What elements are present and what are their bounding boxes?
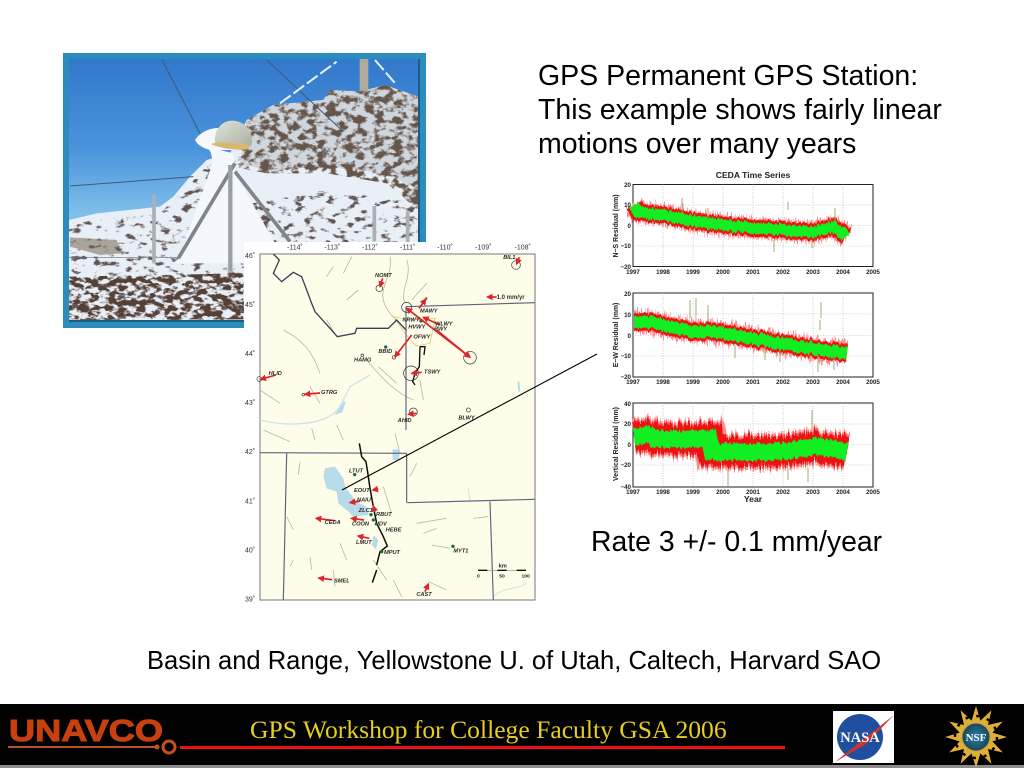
axis labels: -112˚ [362,244,378,252]
NSF logo [945,706,1007,768]
station labels: MAWY [420,309,439,315]
station circles [257,261,520,416]
heading text: This example shows fairly linear [538,94,942,126]
axis labels: 43˚ [245,399,255,407]
chart: vertical residual: Vertical Residual (mm) [613,407,620,481]
station labels: CEDA [325,520,341,526]
chart: E-W residual: 2004 [836,379,850,386]
footer title: GPS Workshop for College Faculty GSA 2006 [250,715,727,744]
axis labels [245,448,255,604]
GPS dome [215,121,252,149]
axis labels: 45˚ [245,301,255,309]
chart: N-S residual: 2001 [746,269,760,276]
chart: N-S residual [613,182,880,276]
scale bar: 50 [499,574,505,580]
axis labels: -110˚ [437,244,453,252]
chart: vertical residual: 1998 [656,489,670,496]
chart: E-W residual: −20 [620,374,632,381]
UNAVCO logo: UNAVCO [9,713,163,748]
station labels: LMUT [356,540,372,546]
axis labels [245,244,531,407]
rate caption: Rate 3 +/- 0.1 mm/year [591,526,882,558]
station labels: HVWY [408,325,427,331]
NASA logo: NASA [840,730,880,746]
chart: N-S residual: 2000 [716,269,730,276]
station labels: NRWY [402,318,421,324]
chart: vertical residual: 2001 [746,489,760,496]
heading text: motions over many years [538,128,856,160]
station labels: GTRG [321,390,338,396]
station labels: MYT1 [453,549,468,555]
chart: vertical residual: 40 [624,401,632,408]
chart: N-S residual: 2003 [806,269,820,276]
fault trace [359,443,387,583]
chart: N-S residual: 2004 [836,269,850,276]
chart: vertical residual [613,401,880,504]
NASA logo [833,711,894,763]
chart: vertical residual: Year [744,494,763,504]
station labels: BLWY [458,416,476,422]
NSF logo: NSF [966,732,987,744]
chart: E-W residual: 1998 [656,379,670,386]
chart: vertical residual: 2002 [776,489,790,496]
chart: vertical residual: 2005 [866,489,880,496]
station labels: IDV [377,521,388,527]
station labels: RWY [434,326,448,332]
footer band [0,704,1024,768]
chart: E-W residual: −10 [620,353,632,360]
chart: N-S residual: 10 [624,202,632,209]
station labels: CAST [416,592,432,598]
chart: E-W residual: E−W Residual (mm) [613,303,620,367]
station labels [269,255,515,424]
UNAVCO logo [8,713,175,753]
photo: GPS station on snowy mountain [63,53,426,328]
scale bar: 0 [477,574,480,580]
tower [360,59,368,91]
station labels: NOMT [375,273,392,279]
chart: N-S residual: 1997 [626,269,640,276]
chart: E-W residual: 2001 [746,379,760,386]
chart: N-S residual: 1998 [656,269,670,276]
scale bar [477,564,530,580]
station labels: RBUT [376,512,392,518]
scale bar: 100 [521,574,530,580]
station labels: COON [352,521,370,527]
chart: N-S residual: 0 [628,223,632,230]
chart: vertical residual: 1999 [686,489,700,496]
chart: vertical residual: −20 [620,462,632,469]
station labels: HLID [269,371,282,377]
chart: E-W residual: 2005 [866,379,880,386]
station labels: HAMG [354,358,372,364]
station labels: EOUT [354,488,370,494]
chart: vertical residual: 20 [624,421,632,428]
chart: vertical residual: 2004 [836,489,850,496]
station labels: WLWY [435,322,454,328]
chart: vertical residual: 2000 [716,489,730,496]
velocity arrows [316,489,428,592]
tripod legs [178,163,290,258]
axis labels: 42˚ [245,448,255,456]
leader line from map to time series [342,354,597,490]
chart: E-W residual [613,291,880,386]
station labels [325,468,468,598]
chart: E-W residual: 1997 [626,379,640,386]
station labels: SMEL [334,579,350,585]
chart: vertical residual: 2003 [806,489,820,496]
station labels: NAIU [357,498,372,504]
scale bar: km [499,564,507,570]
footer red rule [180,746,785,749]
axis labels: 39˚ [245,596,255,604]
velocity arrows [261,257,519,414]
axis labels: -113˚ [324,244,340,252]
chart: vertical residual: 1997 [626,489,640,496]
station labels: BIL1 [503,255,515,261]
chart: E-W residual: 10 [624,312,632,319]
station labels: OFWY [413,335,432,341]
chart: N-S residual: 20 [624,182,632,189]
chart: E-W residual: 2002 [776,379,790,386]
credits caption: Basin and Range, Yellowstone U. of Utah, Caltech, Harvard SAO [147,647,881,675]
chart title: CEDA Time Series [716,170,790,180]
chart: N-S residual: 1999 [686,269,700,276]
chart: vertical residual: 0 [628,442,632,449]
station labels: AHID [397,418,411,424]
station dots [353,473,455,553]
axis labels: 44˚ [245,350,255,358]
heading text: GPS Permanent GPS Station: [538,60,918,92]
station labels: BBID [378,349,392,355]
chart: vertical residual: −40 [620,484,632,491]
chart: E-W residual: 0 [628,333,632,340]
map panel: Basin and Range / Yellowstone GPS velocities [244,242,540,604]
map lower half [245,425,535,604]
axis labels: -111˚ [400,244,415,252]
axis labels: 41˚ [245,497,255,505]
chart: E-W residual: 2003 [806,379,820,386]
chart: N-S residual: −10 [620,243,632,250]
station labels: MPUT [384,550,401,556]
chart: E-W residual: 1999 [686,379,700,386]
station labels: LTUT [349,468,364,474]
axis labels: -109˚ [475,244,491,252]
station labels: TSWY [424,369,442,375]
chart: N-S residual: −20 [620,264,632,271]
station labels: HEBE [386,527,402,533]
chart: N-S residual: N−S Residual (mm) [613,194,620,258]
chart: E-W residual: 2000 [716,379,730,386]
chart: N-S residual: 2002 [776,269,790,276]
map upper half: 1.0 mm/yr [497,295,525,301]
axis labels: -108˚ [515,244,531,252]
axis labels: 40˚ [245,546,255,554]
chart: E-W residual: 20 [624,291,632,298]
map upper half [245,244,535,430]
axis labels: 46˚ [245,252,255,260]
axis labels: -114˚ [287,244,303,252]
chart: N-S residual: 2005 [866,269,880,276]
salt lake [323,467,368,517]
station labels: ZLC1 [358,508,373,514]
